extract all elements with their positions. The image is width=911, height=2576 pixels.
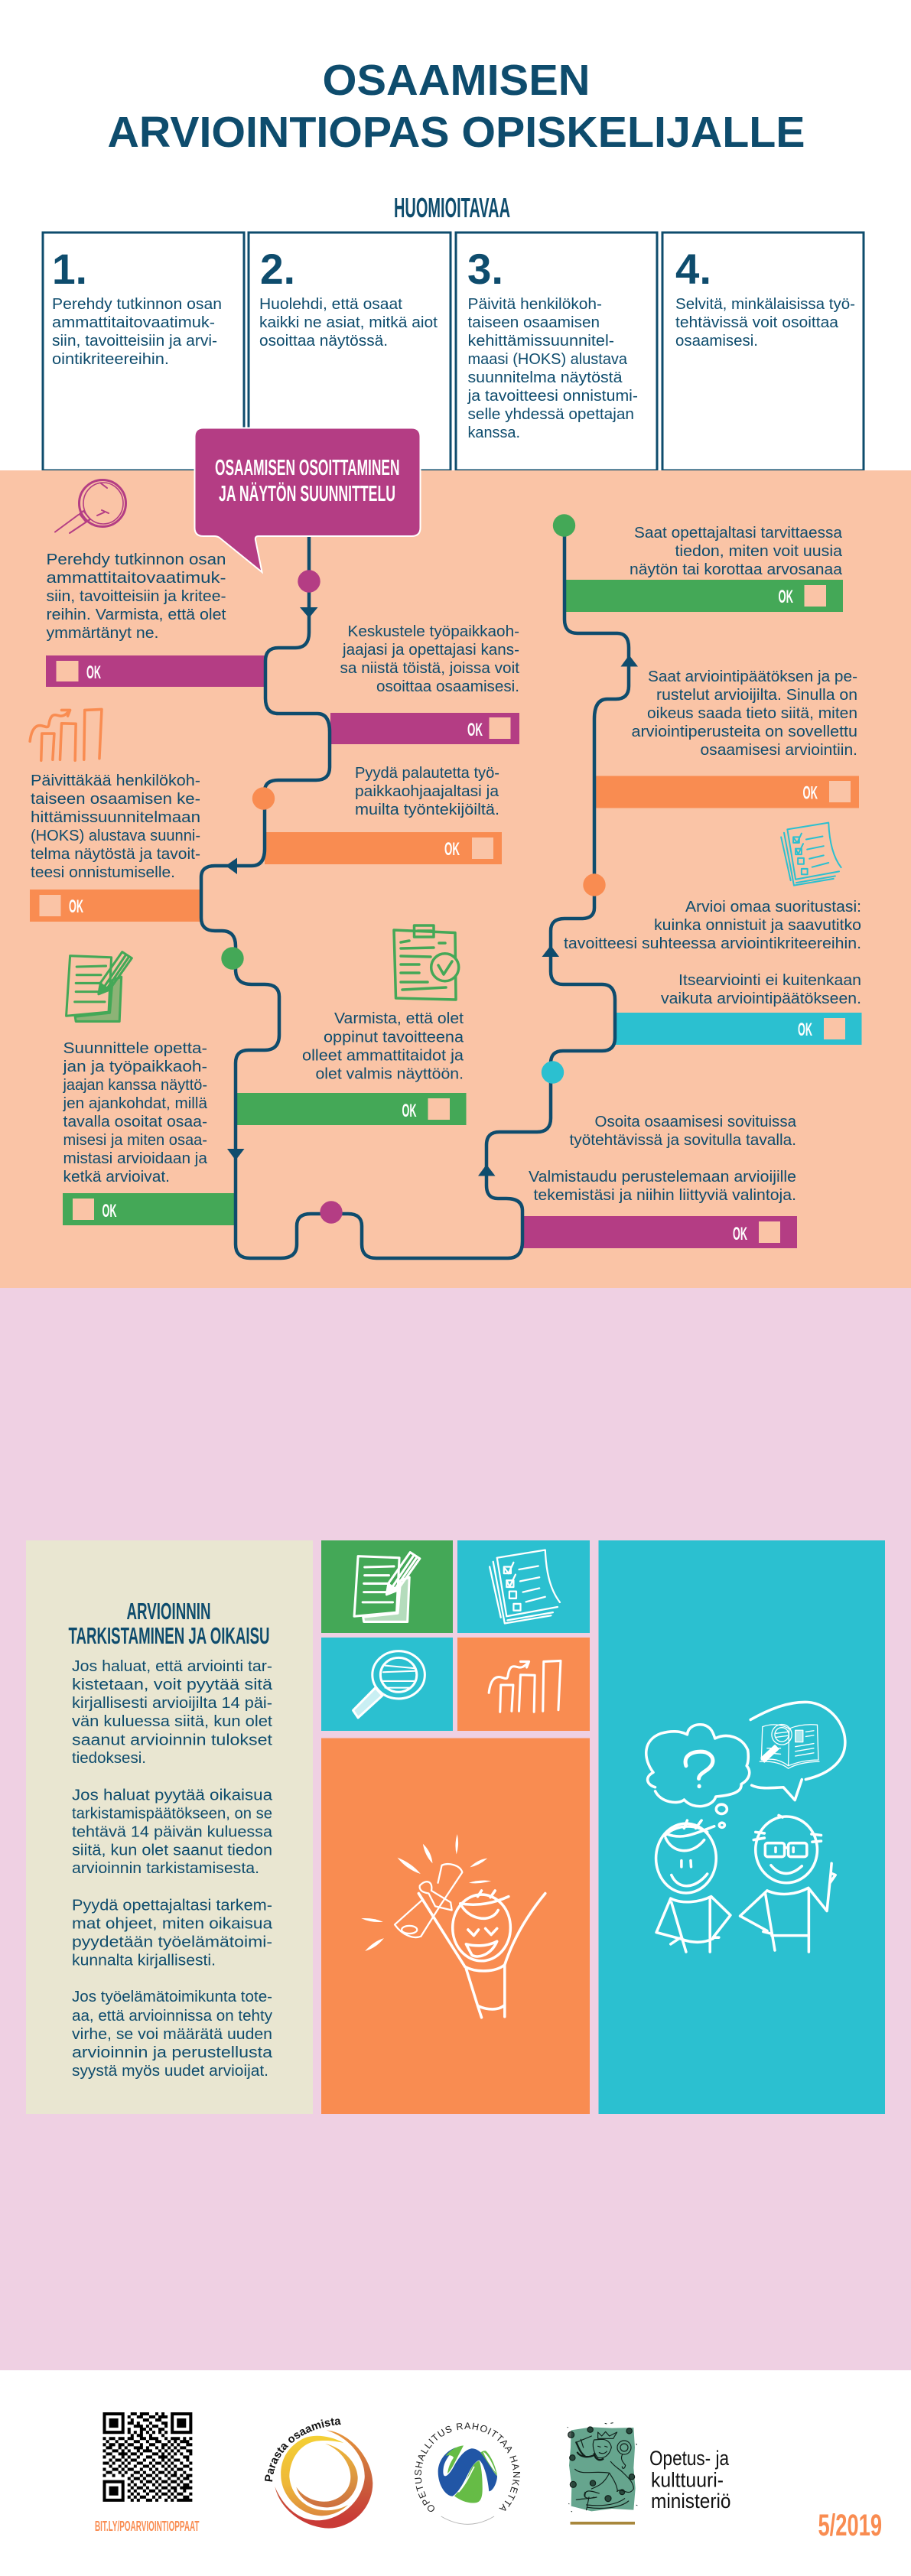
progress bar: orange 3: OK (803, 783, 818, 803)
title (107, 56, 805, 157)
text: varmista: olleet ammattitaidot ja (302, 1046, 464, 1065)
panel body text: mat ohjeet, miten oikaisua (72, 1915, 273, 1932)
text: varmista (302, 1010, 464, 1083)
panel body text: kirjallisesti arvioijilta 14 päi- (72, 1695, 272, 1712)
text: perehdy: ymmärtänyt ne. (46, 624, 159, 642)
progress bar: magenta 3: OK (733, 1224, 747, 1244)
text: osoita osaamisesi: työtehtävissä ja sovitulla tavalla. (569, 1131, 796, 1149)
note box 1 (43, 233, 244, 470)
note box 3: suunnitelma näytöstä (468, 369, 623, 386)
text: osoita osaamisesi (529, 1113, 797, 1204)
text: perehdy: reihin. Varmista, että olet (46, 606, 226, 623)
text: suunnittele: Suunnittele opetta- (63, 1039, 207, 1057)
logo: parasta osaamista: Parasta osaamista (265, 2418, 341, 2482)
panel body text: siitä, kun olet saanut tiedon (72, 1842, 272, 1859)
progress bar: magenta 2 (330, 713, 519, 744)
text: arvioi omaa suoritustasi: Itsearviointi ei kuitenkaan (678, 971, 861, 989)
text: keskustele: jaajasi ja opettajasi kans- (342, 641, 519, 659)
text: pyydä palautetta (355, 764, 499, 818)
note box 3: maasi (HOKS) alustava (468, 351, 628, 368)
panel body text: Jos työelämätoimikunta tote- (72, 1989, 272, 2005)
text: saat opettajaltasi: Saat opettajaltasi tarvittaessa (634, 524, 843, 542)
panel: pink lower background (0, 1288, 911, 2370)
text: suunnittele: ketkä arvioivat. (63, 1168, 170, 1186)
text: keskustele: osoittaa osaamisesi. (376, 678, 519, 695)
panel body text: tiedoksesi. (72, 1750, 146, 1767)
panel body text: arvioinnin ja perustellusta (72, 2044, 273, 2061)
text: perehdy: Perehdy tutkinnon osan (46, 551, 226, 568)
progress bar: orange 1: OK (444, 839, 460, 860)
tile: cyan people illustration (598, 1540, 885, 2114)
panel: footer white area (0, 2370, 911, 2576)
progress bar: orange 2 (30, 890, 201, 922)
progress bar: magenta 2: OK (467, 720, 483, 740)
note box 1: Perehdy tutkinnon osan (52, 296, 222, 313)
text: arvioi omaa suoritustasi: Arvioi omaa suoritustasi: (685, 898, 861, 916)
panel body text: vän kuluessa siitä, kun olet (72, 1713, 272, 1730)
text: keskustele: Keskustele työpaikkaoh- (347, 623, 519, 640)
tile: cyan checklist (457, 1540, 590, 1633)
panel: peach process background (0, 470, 911, 1288)
callout: section heading: OSAAMISEN OSOITTAMINEN (215, 456, 399, 480)
text: saat arviointipäätöksen: oikeus saada tieto siitä, miten (647, 704, 857, 722)
text: suunnittele (62, 1039, 208, 1186)
text: saat opettajaltasi: näytön tai korottaa arvosanaa (630, 561, 843, 578)
panel body text: syystä myös uudet arvioijat. (72, 2063, 268, 2080)
text: arvioi omaa suoritustasi: vaikuta arviointipäätökseen. (661, 990, 861, 1007)
date: 5/2019 (818, 2509, 882, 2542)
progress bar: green 1: OK (102, 1201, 117, 1221)
text: päivittäkää: telma näytöstä ja tavoit- (31, 845, 200, 863)
QR link text: BIT.LY/POARVIOINTIOPPAAT (95, 2519, 199, 2534)
QR code (102, 2414, 192, 2500)
panel body text: Jos haluat pyytää oikaisua (72, 1787, 273, 1804)
tile: orange chart (457, 1638, 590, 1731)
note box 3: kehittämissuunnitel- (468, 333, 614, 350)
text: suunnittele: mistasi arvioidaan ja (63, 1150, 208, 1167)
note box 2 (249, 233, 451, 470)
note box 3: kanssa. (468, 424, 520, 441)
text: pyydä palautetta: Pyydä palautetta työ- (355, 764, 499, 782)
panel: arvioinnin tarkistaminen ja oikaisu (26, 1540, 313, 2114)
note box 1: siin, tavoitteisiin ja arvi- (52, 333, 217, 350)
note box 3: selle yhdessä opettajan (468, 406, 634, 423)
text: suunnittele: jen ajankohdat, millä (62, 1094, 208, 1112)
icon: orange chart (30, 709, 102, 760)
text: saat arviointipäätöksen: rustelut arvioijilta. Sinulla on (656, 686, 857, 704)
title: ARVIOINTIOPAS OPISKELIJALLE (107, 108, 805, 157)
panel body text: saanut arvioinnin tulokset (72, 1732, 273, 1748)
note box 4 (662, 233, 864, 470)
progress bar: orange 2: OK (69, 896, 83, 917)
panel body text (72, 1658, 273, 2080)
note box 3: 3. (467, 245, 503, 293)
panel heading: TARKISTAMINEN JA OIKAISU (69, 1622, 269, 1649)
callout: section heading (194, 428, 421, 572)
note box 4: tehtävissä voit osoittaa (675, 314, 839, 331)
panel body text: tarkistamispäätökseen, on se (72, 1805, 272, 1822)
panel body text: kistetaan, voit pyytää sitä (72, 1677, 273, 1693)
logo: opetus- ja kulttuuriministeriö: Opetus- ja (649, 2447, 730, 2470)
icon: green notes and pencil (67, 952, 132, 1021)
heading: huomioitavaa: HUOMIOITAVAA (394, 192, 510, 223)
progress bar: cyan (615, 1013, 861, 1045)
text: arvioi omaa suoritustasi: tavoitteesi suhteessa arviointikriteereihin. (564, 935, 861, 952)
panel body text: Pyydä opettajaltasi tarkem- (72, 1897, 272, 1914)
panel body text: arvioinnin tarkistamisesta. (72, 1860, 259, 1877)
logo: opetushallitus rahoittaa hanketta: OPETUSHALLITUS RAHOITTAA HANKETTA (415, 2422, 520, 2512)
panel: numbered notes (43, 233, 864, 470)
logo: opetus- ja kulttuuriministeriö: kulttuuri- (651, 2469, 724, 2492)
text: pyydä palautetta: muilta työntekijöiltä. (355, 801, 499, 818)
text: perehdy (46, 551, 226, 642)
text: osoita osaamisesi: Osoita osaamisesi sovituissa (595, 1113, 797, 1130)
progress bar: green 1 (63, 1193, 236, 1225)
tile: green notes (321, 1540, 453, 1633)
text: suunnittele: tavalla osoitat osaa- (63, 1113, 207, 1130)
text: päivittäkää (31, 772, 200, 881)
tile: orange graduate illustration (321, 1738, 590, 2114)
progress bar: magenta 1 (46, 655, 265, 687)
winding path line (201, 535, 629, 1258)
note box 3: ja tavoitteesi onnistumi- (467, 388, 638, 405)
note box 4: Selvitä, minkälaisissa työ- (675, 296, 855, 313)
text: osoita osaamisesi: tekemistäsi ja niihin liittyviä valintoja. (534, 1186, 796, 1204)
text: päivittäkää: (HOKS) alustava suunni- (31, 827, 200, 844)
panel heading: ARVIOINNIN (127, 1598, 211, 1625)
note box 1: 1. (52, 245, 87, 293)
progress bar: green 3 (564, 580, 843, 612)
icon: cyan checklist (781, 823, 841, 886)
path milestone dots (221, 514, 606, 1224)
icon: green clipboard check (394, 925, 459, 1000)
icon: magenta magnifier (55, 480, 125, 533)
text: saat arviointipäätöksen: Saat arviointipäätöksen ja pe- (648, 668, 857, 685)
note box 1: ammattitaitovaatimuk- (52, 314, 215, 331)
text: suunnittele: misesi ja miten osaa- (63, 1131, 207, 1149)
text: saat opettajaltasi (630, 524, 843, 578)
text: perehdy: siin, tavoitteisiin ja kritee- (46, 587, 226, 605)
text: varmista: Varmista, että olet (334, 1010, 464, 1027)
progress bar: orange 1 (265, 832, 502, 864)
logo: opetus- ja kulttuuriministeriö (568, 2423, 731, 2525)
text: pyydä palautetta: paikkaohjaajaltasi ja (355, 782, 499, 800)
text: päivittäkää: taiseen osaamisen ke- (31, 790, 200, 808)
progress bar: magenta 1: OK (86, 662, 101, 683)
panel body text: kunnalta kirjallisesti. (72, 1952, 216, 1969)
text: keskustele (340, 623, 519, 695)
panel body text: aa, että arvioinnissa on tehty (72, 2008, 272, 2025)
text: päivittäkää: teesi onnistumiselle. (31, 864, 175, 881)
text: saat arviointipäätöksen: osaamisesi arviointiin. (701, 741, 857, 759)
text: saat opettajaltasi: tiedon, miten voit uusia (675, 542, 843, 560)
text: perehdy: ammattitaitovaatimuk- (46, 569, 226, 587)
path arrows (226, 607, 638, 1176)
panel heading (69, 1598, 269, 1649)
panel body text: Jos haluat, että arviointi tar- (72, 1658, 272, 1675)
tile: cyan magnifier (321, 1638, 453, 1731)
text: saat arviointipäätöksen (632, 668, 857, 759)
logo: opetus- ja kulttuuriministeriö: ministeriö (651, 2490, 731, 2513)
progress bar: orange 3 (594, 776, 859, 808)
note box 2: 2. (260, 245, 295, 293)
text: suunnittele: jaajan kanssa näyttö- (63, 1076, 207, 1094)
progress bar: green 3: OK (779, 587, 793, 607)
progress bar: cyan: OK (798, 1020, 812, 1040)
progress bar: green 2 (236, 1093, 467, 1125)
text: varmista: oppinut tavoitteena (324, 1028, 464, 1046)
text: varmista: olet valmis näyttöön. (315, 1065, 464, 1083)
panel body text: virhe, se voi määrätä uuden (72, 2026, 272, 2043)
note box 2: osoittaa näytössä. (259, 333, 388, 350)
text: suunnittele: jan ja työpaikkaoh- (62, 1058, 207, 1075)
note box 3: taiseen osaamisen (468, 314, 600, 331)
text: päivittäkää: Päivittäkää henkilökoh- (31, 772, 200, 789)
text: arvioi omaa suoritustasi (564, 898, 861, 1007)
note box 4: 4. (675, 245, 711, 293)
progress bar: magenta 3 (522, 1216, 797, 1248)
callout: section heading: JA NÄYTÖN SUUNNITTELU (219, 481, 395, 506)
text: arvioi omaa suoritustasi: kuinka onnistuit ja saavutitko (654, 916, 861, 934)
note box 1: ointikriteereihin. (52, 351, 169, 368)
note box 2: Huolehdi, että osaat (259, 296, 402, 313)
panel body text: pyydetään työelämätoimi- (72, 1934, 272, 1950)
note box 3: Päivitä henkilökoh- (468, 296, 602, 313)
panel body text: tehtävä 14 päivän kuluessa (72, 1823, 273, 1840)
progress bar: green 2: OK (402, 1101, 417, 1121)
note box 3 (456, 233, 657, 470)
note box 4: osaamisesi. (675, 333, 758, 350)
text: keskustele: sa niistä töistä, joissa voit (340, 659, 519, 677)
text: saat arviointipäätöksen: arviointiperusteita on sovellettu (632, 723, 857, 740)
text: osoita osaamisesi: Valmistaudu perustelemaan arvioijille (529, 1168, 796, 1186)
logo: parasta osaamista (265, 2418, 373, 2529)
text: päivittäkää: hittämissuunnitelmaan (31, 808, 200, 826)
note box 2: kaikki ne asiat, mitkä aiot (259, 314, 438, 331)
title: OSAAMISEN (323, 56, 591, 105)
